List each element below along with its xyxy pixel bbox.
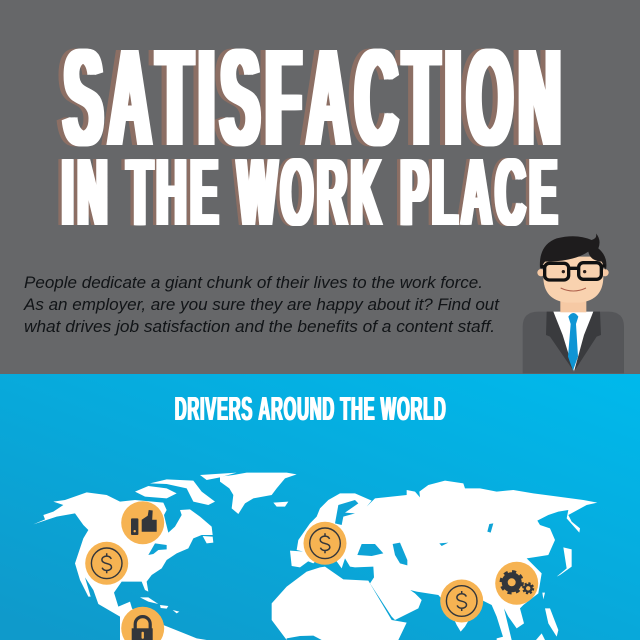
icon: gears badge — [495, 562, 538, 605]
lower section background — [0, 374, 640, 640]
Eurasia and Africa — [272, 481, 597, 640]
icon: dollar badge North America — [85, 542, 128, 585]
title line 2: IN THE WORK PLACE — [59, 139, 558, 246]
icon: dollar badge Europe — [304, 522, 346, 565]
header background — [0, 0, 640, 374]
icon: businessman with glasses — [523, 233, 624, 373]
Americas — [33, 473, 297, 640]
title line 1: SATISFACTION — [60, 21, 563, 175]
intro paragraph: what drives job satisfaction and the benefits of a content staff. — [24, 318, 495, 336]
icon: thumbs up badge — [121, 501, 164, 544]
intro paragraph: As an employer, are you sure they are happy about it? Find out — [23, 296, 500, 314]
world map — [33, 473, 597, 640]
intro paragraph: People dedicate a giant chunk of their lives to the work force. — [24, 274, 483, 292]
icon: lock badge — [121, 607, 164, 640]
section heading: DRIVERS AROUND THE WORLD — [174, 390, 446, 427]
intro paragraph — [23, 274, 500, 336]
icon: dollar badge India — [440, 580, 483, 622]
